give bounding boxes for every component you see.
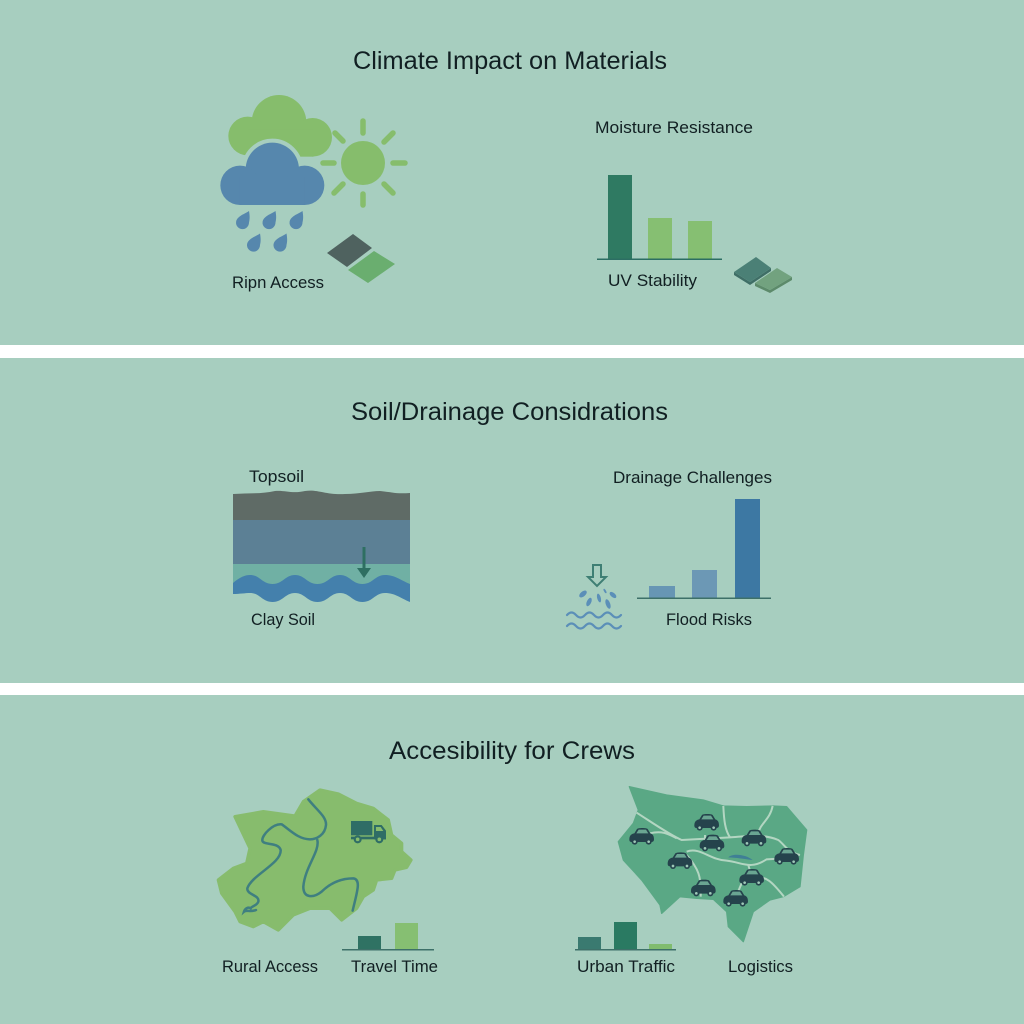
- icon: blue rain cloud: [220, 143, 324, 205]
- label: clay soil: Clay Soil: [251, 610, 315, 629]
- label: moisture resistance: Moisture Resistance: [595, 118, 753, 137]
- bar chart: flood risks: [637, 499, 771, 599]
- bar chart: urban traffic: [575, 922, 676, 950]
- map: rural area: [218, 790, 411, 930]
- icon: flood water: [567, 565, 621, 628]
- title: soil drainage: Soil/Drainage Considrations: [351, 398, 668, 426]
- urban roads: [637, 806, 800, 897]
- icon: green cloud: [228, 95, 332, 157]
- label: topsoil: Topsoil: [249, 467, 304, 486]
- label: flood risks: Flood Risks: [666, 610, 752, 629]
- panel: accessibility: [0, 695, 1024, 1024]
- title: climate impact: Climate Impact on Materials: [353, 47, 667, 75]
- label: travel time: Travel Time: [351, 957, 438, 976]
- bar chart: travel time: [342, 923, 434, 950]
- icon: material samples: [734, 257, 792, 293]
- icon: sun: [323, 121, 405, 205]
- icon: truck: [351, 821, 386, 843]
- label: ripn access: Ripn Access: [232, 273, 324, 292]
- arrow: water infiltration: [357, 547, 371, 578]
- icon: rain drops: [236, 211, 303, 252]
- icon: cars: [629, 814, 799, 907]
- bar chart: uv stability: [597, 175, 722, 260]
- rural roads: [244, 799, 358, 912]
- map: urban area: [618, 787, 807, 942]
- label: drainage challenges: Drainage Challenges: [613, 468, 772, 487]
- title: accessibility: Accesibility for Crews: [389, 737, 635, 765]
- icon: material tiles: [327, 234, 395, 283]
- panel: soil and drainage: [0, 358, 1024, 683]
- label: rural access: Rural Access: [222, 957, 318, 976]
- panel: climate impact: [0, 0, 1024, 345]
- label: urban traffic: Urban Traffic: [577, 957, 675, 976]
- label: uv stability: UV Stability: [608, 271, 697, 290]
- label: logistics: Logistics: [728, 957, 793, 976]
- diagram: soil layers: [233, 491, 410, 602]
